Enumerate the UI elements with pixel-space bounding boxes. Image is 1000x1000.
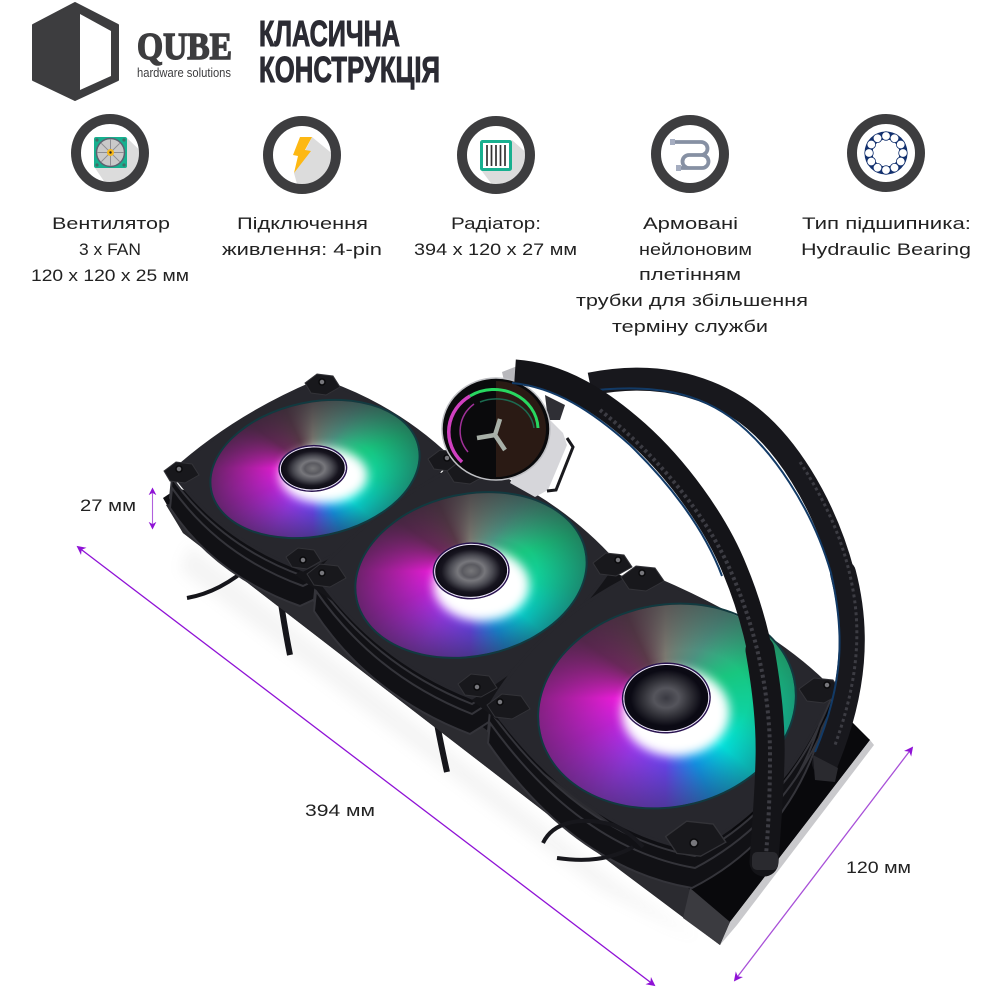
spec labels: 3 x FAN [79, 240, 141, 259]
arrow: 120 mm: 120 мм [846, 858, 911, 877]
arrow: 394 mm [78, 547, 654, 985]
icon: braided tube [656, 120, 724, 188]
icon: fan [76, 119, 150, 190]
spec labels: трубки для збільшення [576, 291, 808, 310]
icon: radiator [462, 121, 540, 195]
corner mounts [164, 374, 842, 856]
hub [279, 445, 347, 492]
arrow: 394 mm: 394 мм [305, 801, 375, 820]
spec labels: Радіатор: [451, 214, 541, 233]
tube fittings [752, 755, 838, 870]
spec labels: 120 x 120 x 25 мм [31, 266, 189, 285]
back tube [580, 379, 857, 763]
logo: QUBE hardware solutions: QUBE [137, 26, 232, 68]
fan stack layers [170, 464, 832, 888]
title: КЛАСИЧНА [259, 13, 400, 54]
gaps between fan frames [295, 470, 645, 730]
fan 3 disc [520, 581, 814, 831]
spec labels: 394 x 120 x 27 мм [414, 240, 577, 259]
title: КОНСТРУКЦІЯ [259, 49, 440, 90]
radiator [163, 488, 874, 945]
white glow [622, 668, 730, 756]
fan 1 disc [199, 383, 431, 555]
spec labels: Армовані [643, 214, 738, 233]
fan frames [172, 380, 832, 850]
fan 2 disc [341, 473, 601, 677]
logo: QUBE hardware solutions [33, 3, 232, 100]
front tube [512, 372, 770, 862]
pump [442, 365, 573, 497]
arrow: 27 mm: 27 мм [80, 496, 136, 515]
spec labels: Hydraulic Bearing [801, 240, 971, 259]
spec labels [31, 214, 971, 336]
spec labels: терміну служби [612, 317, 768, 336]
cables behind radiator [187, 564, 447, 772]
hub [433, 543, 509, 599]
spec labels: Тип підшипника: [802, 214, 971, 233]
screws [176, 379, 830, 847]
white glow [433, 549, 529, 621]
title [259, 13, 440, 90]
icon: lightning [268, 121, 340, 195]
fan 3 power cables [543, 821, 643, 860]
hub [622, 662, 710, 733]
arrow: 27 mm [80, 489, 152, 528]
icon: bearing [852, 119, 920, 187]
spec labels: живлення: 4-pin [222, 240, 382, 259]
header and specification icons [32, 2, 970, 336]
spec labels: Вентилятор [52, 214, 170, 233]
logo: QUBE hardware solutions: hardware solutions [137, 66, 231, 80]
white glow [280, 447, 368, 503]
spec labels: плетінням [639, 265, 741, 284]
arrow: 120 mm [735, 748, 912, 980]
soft shadow [180, 545, 700, 940]
spec labels: Підключення [237, 214, 368, 233]
spec labels: нейлоновим [639, 240, 752, 259]
